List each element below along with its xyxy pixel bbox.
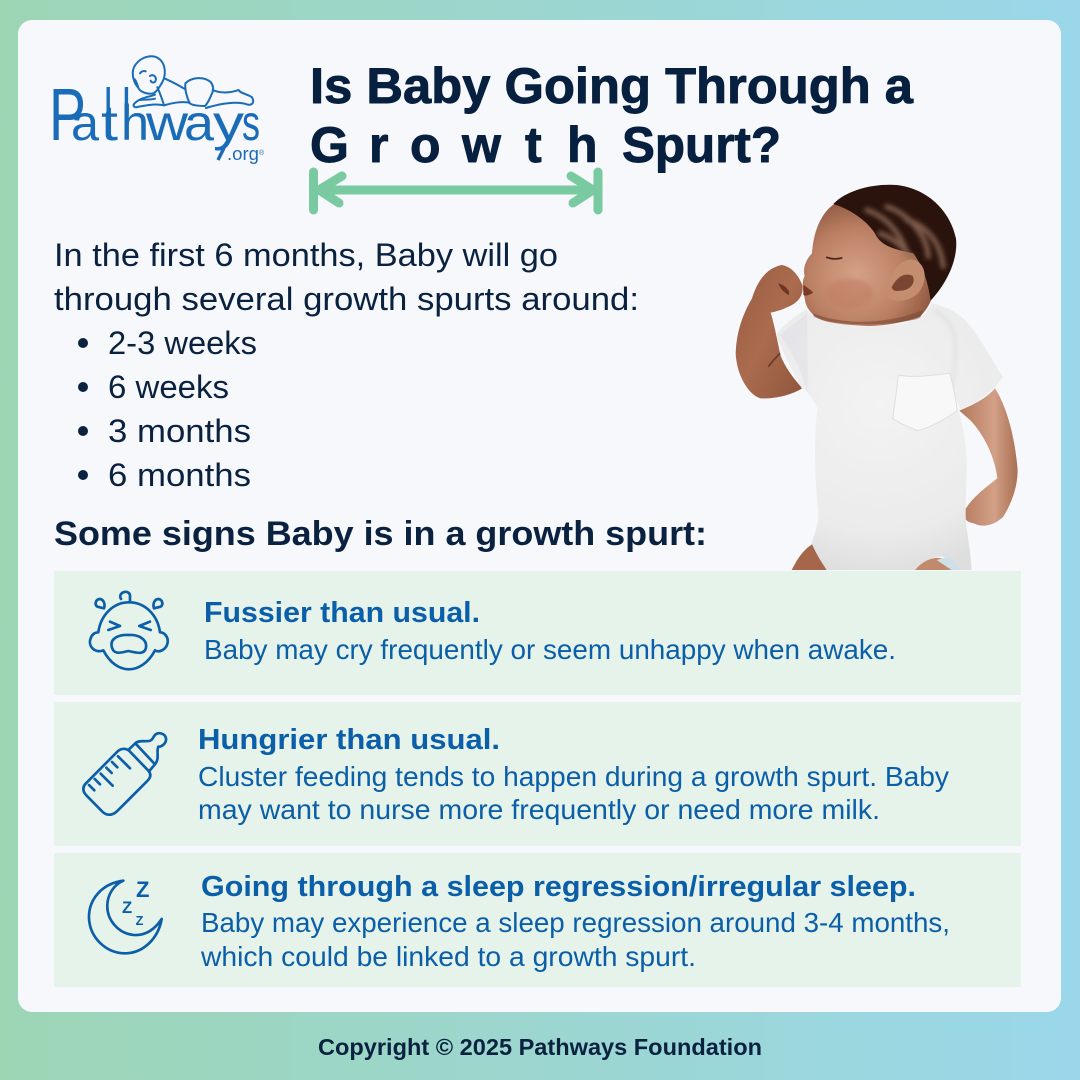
panel: hungrier than usual [54,702,1021,846]
sub-heading: Some signs Baby is in a growth spurt: [54,515,707,553]
text: hungrier: may want to nurse more frequently or need more milk. [198,794,880,825]
logo wordmark: .org [227,144,259,164]
text: fussier: Baby may cry frequently or seem unhappy when awake. [204,634,896,665]
title: Is Baby Going Through a [310,58,914,114]
logo wordmark: w [145,95,189,151]
logo wordmark: h [121,95,149,151]
text: hungrier: Cluster feeding tends to happen during a growth spurt. Baby [198,761,949,792]
icon: moon with zzz: Z [122,898,132,917]
logo baby line drawing [133,56,253,108]
text: fussier: Fussier than usual. [204,597,480,629]
panel: fussier than usual [54,571,1021,695]
icon: baby bottle [83,733,166,815]
text: sleep: which could be linked to a growth spurt. [200,941,696,972]
title [310,58,914,173]
bullet list: growth spurt ages [78,325,257,493]
bullet list: growth spurt ages: 2-3 weeks [108,325,257,361]
logo wordmark: ® [259,149,265,157]
icon: moon with zzz [89,877,162,953]
intro text [54,237,639,317]
text: sleep: Baby may experience a sleep regression around 3-4 months, [201,907,950,938]
logo wordmark [49,73,265,164]
text: hungrier: Hungrier than usual. [198,724,500,756]
bullet list: growth spurt ages: 6 weeks [108,369,229,405]
logo wordmark: s [242,95,260,151]
footer copyright: Copyright © 2025 Pathways Foundation [318,1034,762,1060]
logo wordmark: P [49,73,86,156]
panel: sleep regression [54,853,1021,987]
title: Spurt? [622,117,781,173]
icon: moon with zzz: Z [136,877,149,902]
logo: Pathways.org [49,56,265,164]
bullet list: growth spurt ages: 6 months [108,457,251,493]
text: hungrier [198,724,949,825]
text: sleep: Going through a sleep regression/irregular sleep. [201,871,916,903]
icon: moon with zzz: Z [136,914,144,928]
title: Growth [310,117,598,173]
logo wordmark: a [184,95,214,151]
intro text: through several growth spurts around: [54,281,639,317]
arrow: growth span [314,172,598,210]
intro text: In the first 6 months, Baby will go [54,237,558,273]
bullet list: growth spurt ages: 3 months [108,413,251,449]
photo illustration: sleeping baby in white onesie [736,185,1018,570]
logo wordmark: t [101,95,118,151]
icon: crying baby [90,592,168,669]
logo wordmark: y [213,95,244,151]
text: sleep [200,871,950,972]
logo wordmark: a [71,95,99,151]
text: fussier [204,597,896,665]
